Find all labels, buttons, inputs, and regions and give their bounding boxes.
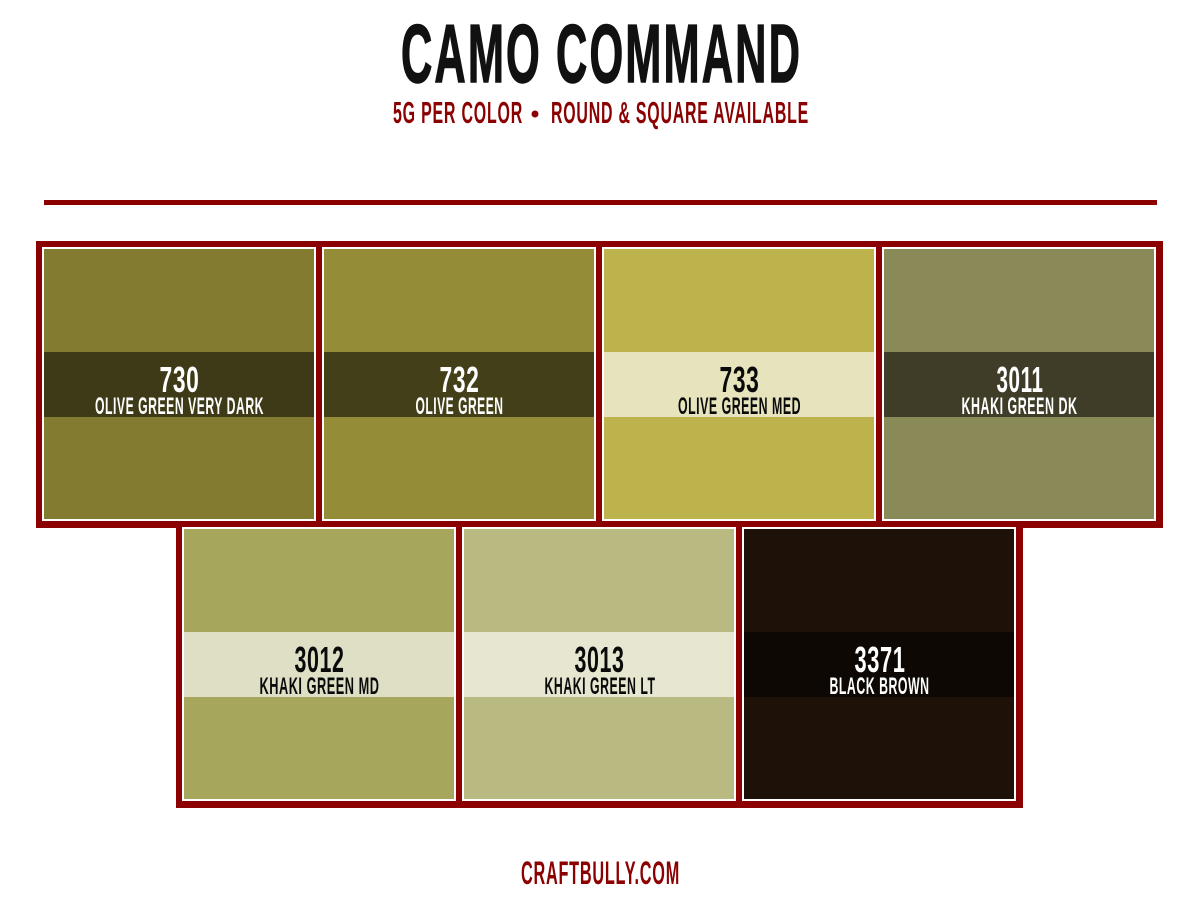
- swatch: 3012: 3012: [294, 639, 344, 680]
- swatch: 3012: KHAKI GREEN MD: [260, 673, 380, 700]
- swatch: 733: 733: [720, 359, 760, 400]
- swatch: 732: [322, 247, 596, 521]
- swatch: 732: 732: [440, 359, 480, 400]
- panel: bottom row of swatches: [176, 521, 1023, 808]
- swatch: 3371: 3371: [854, 639, 906, 680]
- swatch: 3013: [462, 527, 736, 801]
- swatch: 730: [42, 247, 316, 521]
- swatch: 3371: [742, 527, 1016, 801]
- panel: top row of swatches: [36, 241, 1163, 528]
- swatch: 3011: [882, 247, 1156, 521]
- swatch: 3011: KHAKI GREEN DK: [962, 393, 1078, 420]
- swatch: 733: OLIVE GREEN MED: [678, 393, 801, 420]
- swatch: 3012: [182, 527, 456, 801]
- subtitle: 5G PER COLOR: [393, 96, 523, 130]
- swatch: 730: 730: [160, 359, 200, 400]
- subtitle: [393, 96, 809, 130]
- title: CAMO COMMAND: [401, 7, 802, 100]
- footer: website: CRAFTBULLY.COM: [521, 855, 680, 891]
- swatch: 730: OLIVE GREEN VERY DARK: [95, 393, 264, 420]
- swatch: 3371: BLACK BROWN: [830, 673, 930, 700]
- swatch: 733: [602, 247, 876, 521]
- subtitle: ROUND & SQUARE AVAILABLE: [551, 96, 809, 130]
- swatch: 732: OLIVE GREEN: [416, 393, 504, 420]
- swatch: 3013: 3013: [574, 639, 624, 680]
- swatch: 3013: KHAKI GREEN LT: [544, 673, 656, 700]
- swatch: 3011: 3011: [996, 359, 1044, 400]
